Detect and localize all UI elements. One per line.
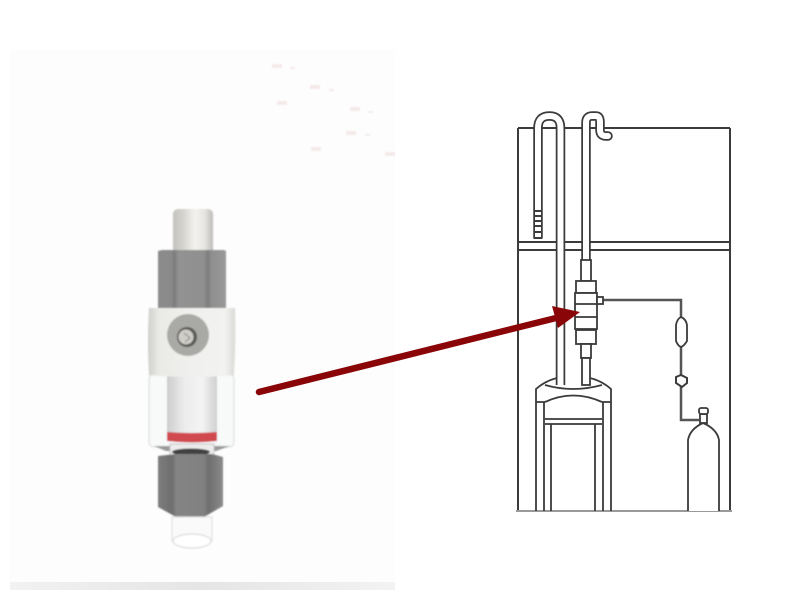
glass body (149, 374, 234, 458)
bubble counter (676, 317, 687, 347)
white inner cylinder (167, 374, 217, 433)
red seal ring (167, 432, 217, 442)
diffuser in diagram (575, 260, 603, 385)
plumbing diagram (516, 116, 732, 511)
inflow tube with hook (582, 116, 608, 262)
product backdrop (10, 50, 395, 590)
white collar (148, 308, 235, 377)
CO2 tubing (603, 300, 699, 420)
product photo: inline diffuser (148, 209, 235, 548)
check valve (676, 375, 687, 387)
bottom clear hose barb (172, 517, 212, 548)
red arrow (259, 306, 580, 392)
top grey hex nut (158, 250, 226, 308)
aquarium tank (516, 128, 732, 511)
top hose barb (173, 209, 213, 250)
CO2 inlet port (167, 314, 209, 356)
bottom grey hex nut (158, 454, 223, 517)
CO2 cylinder (688, 408, 719, 511)
faint watermark specks (272, 64, 395, 156)
outflow J tube (534, 116, 560, 385)
filter canister (536, 378, 611, 511)
